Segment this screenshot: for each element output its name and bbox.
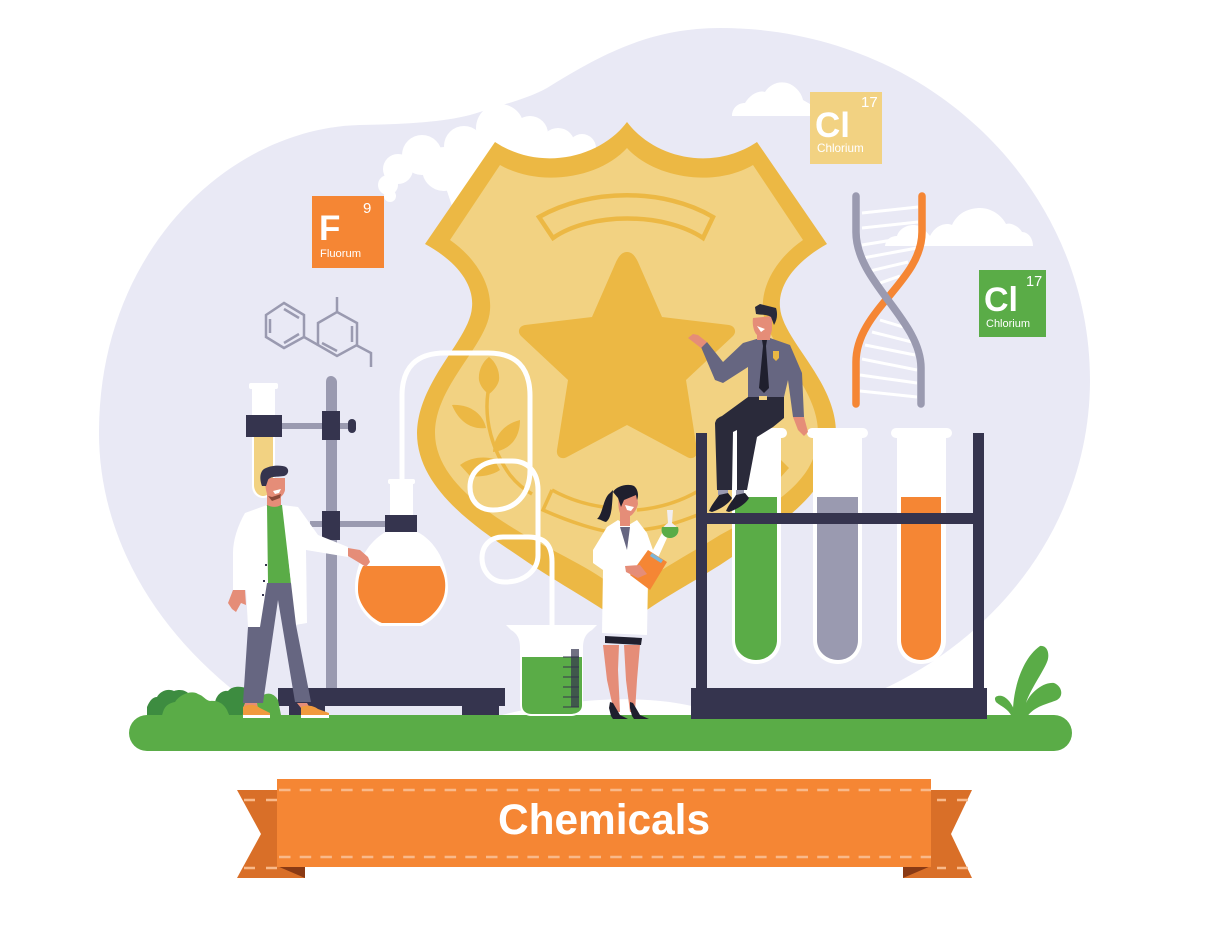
element tile: chlorium green: Chlorium bbox=[986, 318, 1030, 330]
stand rod bbox=[326, 376, 337, 690]
element tile: chlorium yellow: 17 bbox=[861, 94, 878, 111]
woman skirt bbox=[605, 636, 642, 645]
man smile bbox=[273, 489, 281, 494]
element tile: chlorium yellow: Chlorium bbox=[817, 142, 864, 155]
beaker scale bbox=[563, 657, 579, 707]
ribbon title: Chemicals bbox=[498, 796, 710, 843]
badge top banner bbox=[539, 195, 713, 238]
test tube grey bbox=[807, 428, 868, 664]
man beard bbox=[268, 494, 281, 501]
white glass tube bbox=[402, 353, 552, 626]
ribbon tail stitching bbox=[244, 800, 968, 868]
plant right bbox=[995, 646, 1061, 717]
woman heels bbox=[609, 702, 649, 719]
element tile: chlorium green bbox=[979, 270, 1046, 337]
officer trousers bbox=[715, 397, 784, 490]
cloud: right bbox=[885, 208, 1033, 246]
ribbon banner bbox=[237, 779, 972, 878]
element tile: fluorum: F bbox=[319, 209, 340, 248]
woman lab coat bbox=[593, 520, 667, 635]
ribbon stitching bbox=[279, 790, 931, 857]
element tile: chlorium yellow: Cl bbox=[815, 106, 850, 145]
element tile: fluorum bbox=[312, 196, 384, 268]
scientist woman bbox=[593, 485, 678, 719]
ribbon right tail bbox=[903, 790, 972, 878]
ribbon main bbox=[277, 779, 931, 867]
ribbon left tail bbox=[237, 790, 305, 878]
DNA grey strand bbox=[856, 196, 921, 404]
bush dark bbox=[147, 687, 250, 720]
officer socks bbox=[718, 490, 744, 495]
officer tie bbox=[759, 340, 769, 393]
man hair bbox=[260, 466, 288, 486]
officer smile bbox=[757, 326, 765, 332]
officer shoes bbox=[709, 493, 749, 512]
stand arms bbox=[280, 423, 350, 429]
badge laurel bbox=[452, 357, 532, 494]
woman top bbox=[620, 527, 630, 550]
officer badge small bbox=[773, 351, 779, 361]
man neck and head bbox=[265, 478, 285, 507]
man coat buttons bbox=[262, 564, 267, 596]
badge right accent bbox=[780, 459, 789, 478]
stand base bbox=[278, 688, 505, 716]
ground strip bbox=[129, 715, 1072, 751]
DNA rungs bbox=[860, 207, 918, 397]
test tube green bbox=[727, 428, 787, 664]
man shoes bbox=[243, 703, 329, 718]
round flask bbox=[355, 479, 448, 626]
element tile: fluorum: Fluorum bbox=[320, 248, 361, 260]
ribbon folds bbox=[277, 866, 931, 878]
cloud: behind badge with smoke bbox=[378, 104, 600, 230]
small flask bbox=[662, 510, 678, 538]
lab stand bbox=[246, 376, 505, 716]
element tile: chlorium yellow bbox=[810, 92, 882, 164]
DNA orange strand bbox=[856, 196, 922, 404]
element tile: chlorium green: 17 bbox=[1026, 274, 1042, 290]
woman clipboard bbox=[630, 550, 667, 590]
background blob bbox=[99, 28, 1090, 720]
badge lower banner bbox=[543, 490, 700, 533]
man shirt bbox=[266, 505, 291, 584]
woman hand bbox=[625, 565, 647, 578]
officer shirt bbox=[701, 338, 804, 417]
officer head bbox=[753, 316, 772, 340]
bush light bbox=[160, 692, 282, 722]
woman neck and head bbox=[618, 493, 638, 526]
stand clamps bbox=[246, 411, 356, 540]
scientist man bbox=[228, 466, 370, 718]
test tube orange bbox=[891, 428, 952, 664]
man lab coat bbox=[233, 505, 348, 627]
molecule diagram bbox=[266, 297, 371, 367]
bush left bbox=[147, 687, 282, 722]
woman legs bbox=[603, 645, 640, 712]
white ground mound bbox=[498, 690, 980, 720]
badge inner panel bbox=[435, 148, 818, 598]
officer hands bbox=[688, 334, 808, 436]
badge outer shield bbox=[417, 122, 836, 626]
woman smile bbox=[625, 505, 634, 511]
officer hair bbox=[755, 304, 777, 325]
badge star bbox=[519, 252, 735, 458]
officer belt buckle bbox=[759, 396, 767, 400]
man pants bbox=[243, 583, 311, 703]
test tube yellow bbox=[252, 386, 275, 498]
police officer bbox=[688, 304, 808, 512]
man hands bbox=[228, 548, 370, 612]
element tile: chlorium green: Cl bbox=[984, 281, 1018, 319]
beaker bbox=[506, 625, 597, 716]
woman clip bbox=[650, 553, 663, 563]
rack frame bbox=[691, 433, 987, 719]
DNA helix bbox=[856, 196, 922, 404]
element tile: fluorum: 9 bbox=[363, 200, 371, 217]
test tube rack bbox=[691, 428, 987, 719]
cloud: top right bbox=[732, 82, 810, 116]
police badge bbox=[417, 122, 836, 626]
woman hair bbox=[597, 485, 638, 522]
